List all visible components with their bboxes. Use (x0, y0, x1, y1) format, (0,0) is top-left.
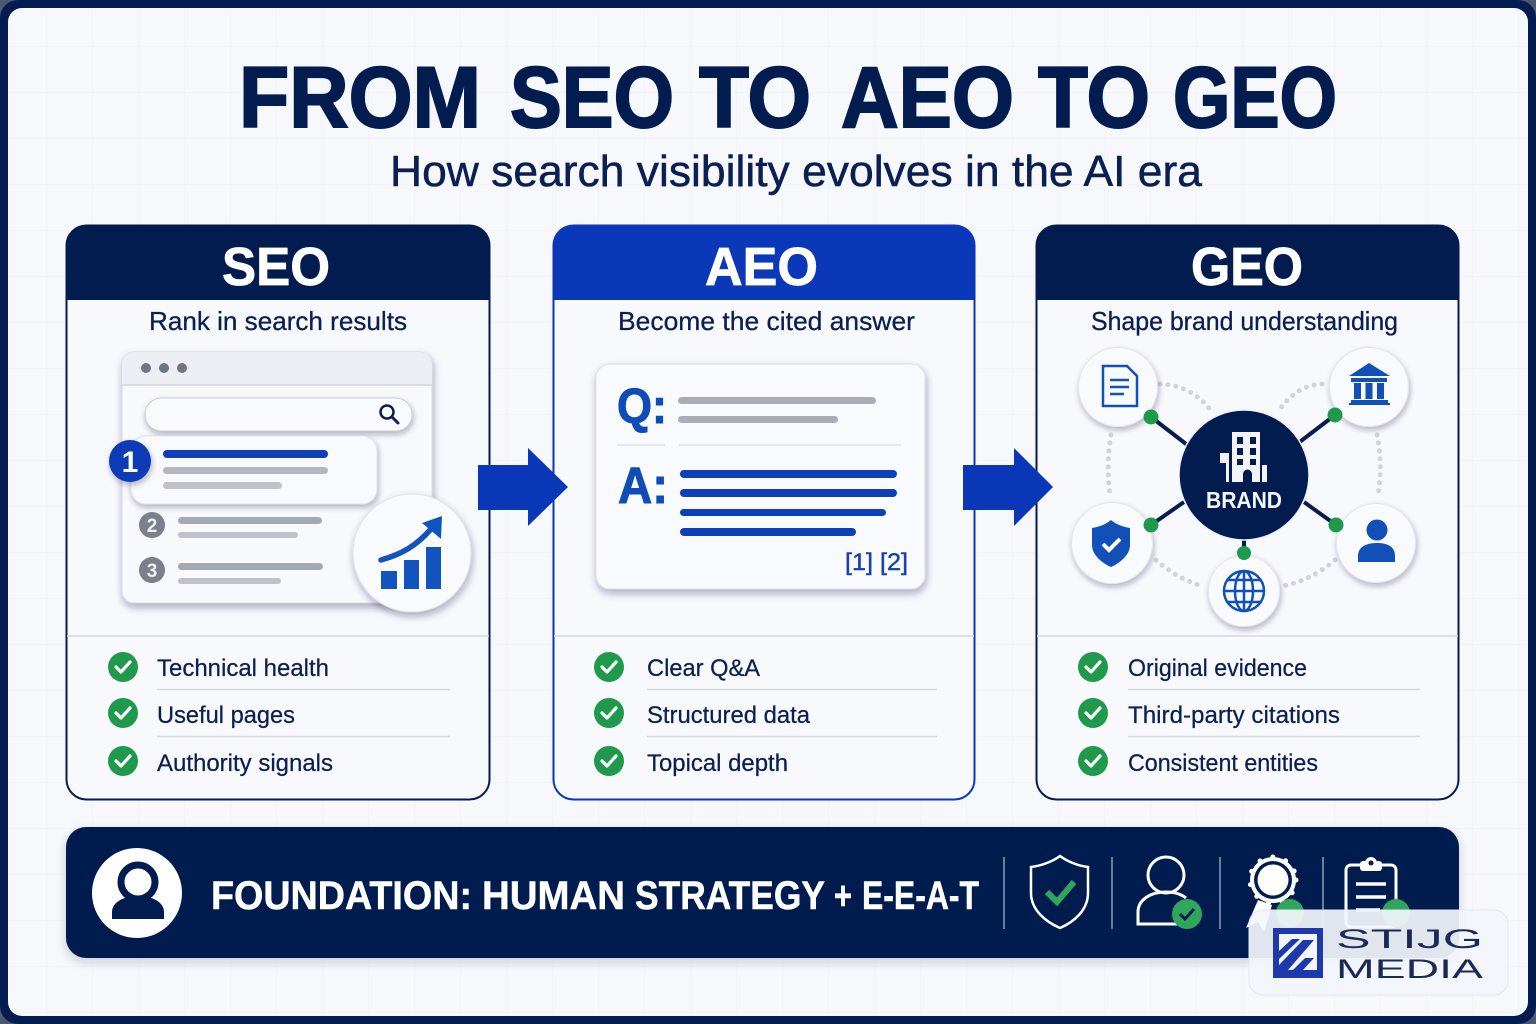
node: document (1078, 348, 1158, 426)
node: shield (1072, 502, 1152, 584)
panel: SEO (66, 225, 490, 800)
green connector dots (1144, 408, 1344, 560)
AEO checklist (554, 636, 974, 777)
node: institution (1330, 348, 1408, 426)
icon: award rosette (1246, 857, 1304, 932)
foundation text: HUMAN (482, 874, 625, 918)
panel: AEO (553, 225, 975, 800)
GEO checklist: Third-party citations (1128, 702, 1340, 729)
subtitle: How search visibility evolves in the AI era (390, 147, 1203, 196)
foundation text: FOUNDATION: (211, 874, 472, 918)
logo: Stijg Media (1249, 910, 1508, 995)
browser window illustration (109, 352, 471, 612)
logo mark (1273, 928, 1323, 978)
AEO tagline: Become the cited answer (618, 306, 915, 336)
logo wordmark: STIJG (1336, 924, 1483, 954)
question: Q: (617, 380, 667, 434)
icon: shield check (1031, 856, 1088, 928)
result 1 highlighted: 1 (122, 446, 138, 479)
search bar (145, 398, 412, 431)
title: SEO (510, 50, 674, 146)
AEO header (553, 225, 975, 300)
GEO tagline: Shape brand understanding (1091, 306, 1398, 336)
SEO checklist: Useful pages (157, 702, 295, 729)
node: globe (1208, 556, 1280, 626)
SEO header (66, 225, 490, 300)
result 3: 3 (147, 561, 157, 582)
node: person (1336, 504, 1416, 582)
Q and A card illustration (596, 364, 925, 589)
title: AEO (841, 50, 1014, 146)
foundation text: + (834, 874, 852, 918)
brand network diagram (1072, 348, 1416, 626)
AEO checklist: Structured data (647, 702, 811, 729)
foundation bar (66, 827, 1459, 958)
SEO checklist: Authority signals (157, 750, 333, 777)
arrow: AEO to GEO (963, 448, 1053, 526)
answer (618, 457, 897, 536)
result 2 (139, 512, 322, 538)
GEO checklist: Original evidence (1128, 655, 1307, 682)
AEO checklist: Topical depth (647, 750, 788, 777)
panel: GEO (1036, 225, 1459, 800)
title: TO (699, 50, 811, 146)
SEO heading: SEO (222, 237, 330, 297)
icon: verified person (1138, 857, 1202, 929)
foundation text (211, 874, 979, 918)
icon: human avatar (92, 848, 182, 938)
logo: Stijg Media: MEDIA (1336, 954, 1483, 984)
GEO checklist (1037, 636, 1458, 777)
growth chart badge (353, 494, 471, 612)
title: TO (1038, 50, 1150, 146)
question (617, 380, 876, 434)
result 2: 2 (147, 516, 157, 537)
result 1 highlighted (109, 436, 377, 504)
icon: clipboard (1346, 857, 1410, 927)
answer: A: (618, 457, 668, 514)
brand hub: BRAND (1206, 487, 1282, 513)
GEO checklist: Consistent entities (1128, 750, 1318, 777)
SEO checklist: Technical health (157, 655, 329, 682)
foundation text: E-E-A-T (862, 874, 979, 918)
foundation text: STRATEGY (635, 874, 825, 918)
AEO heading: AEO (705, 237, 818, 297)
title (239, 50, 1337, 146)
brand hub (1179, 410, 1309, 540)
GEO heading: GEO (1191, 237, 1303, 297)
result 3 (139, 557, 323, 584)
SEO tagline: Rank in search results (149, 306, 407, 336)
AEO checklist: Clear Q&A (647, 655, 760, 682)
citations: [1] [2] (845, 549, 908, 576)
SEO checklist (67, 636, 489, 777)
title: GEO (1173, 50, 1337, 146)
arrow: SEO to AEO (478, 448, 568, 526)
title: FROM (239, 50, 481, 146)
GEO header (1036, 225, 1459, 300)
